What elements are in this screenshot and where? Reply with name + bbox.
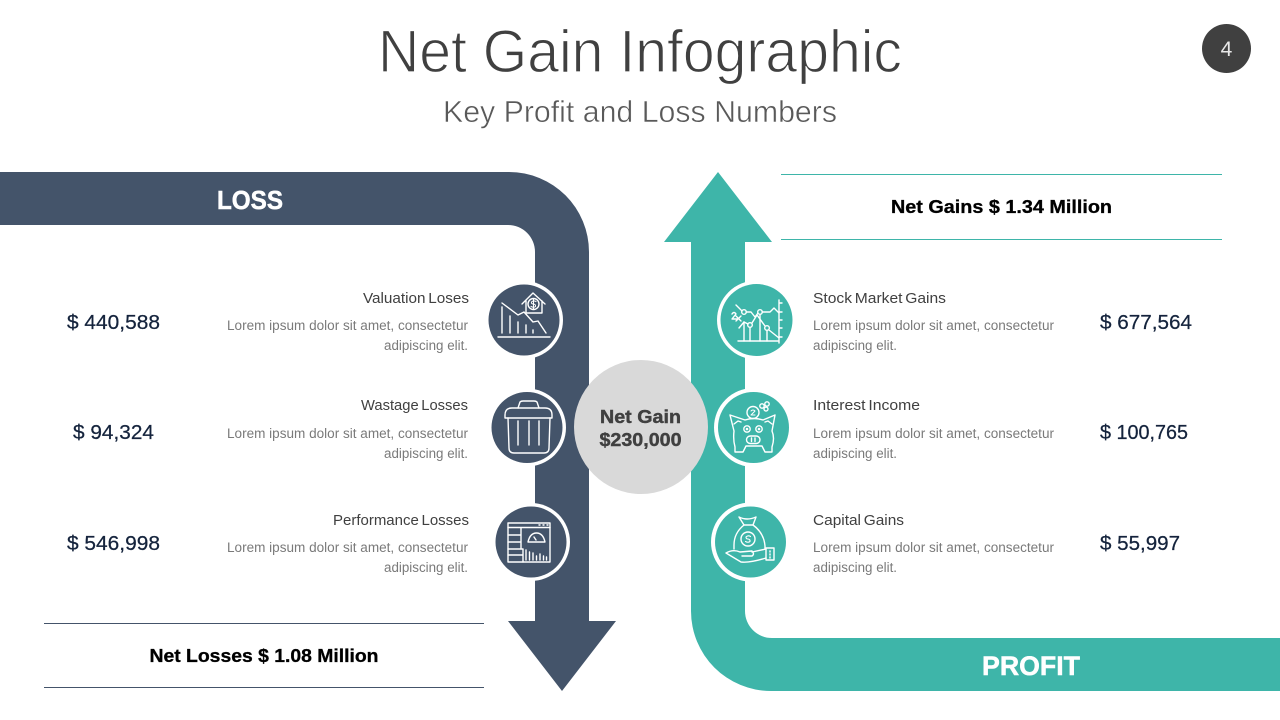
net losses total: Net Losses $ 1.08 Million xyxy=(150,646,378,666)
body: adipiscing elit. xyxy=(813,446,897,461)
profit row 1 xyxy=(717,280,1192,360)
title: Net Gain Infographic xyxy=(378,18,902,85)
icon: falling chart with house xyxy=(485,281,563,359)
body: Lorem ipsum dolor sit amet, consectetur xyxy=(813,318,1054,333)
heading: Valuation Loses xyxy=(363,290,469,307)
page number badge: 4 xyxy=(1221,38,1233,61)
amount: $ 94,324 xyxy=(73,422,154,444)
body: adipiscing elit. xyxy=(813,338,897,353)
heading: Stock Market Gains xyxy=(813,290,946,307)
loss label: LOSS xyxy=(217,185,283,215)
net gain circle xyxy=(574,360,708,494)
net gain circle: Net Gain xyxy=(600,407,681,427)
icon: money bag in hand xyxy=(711,502,790,582)
body: adipiscing elit. xyxy=(384,446,468,461)
loss row 3 xyxy=(67,503,570,581)
loss row 1 xyxy=(67,281,563,359)
body: Lorem ipsum dolor sit amet, consectetur xyxy=(227,540,468,555)
icon: piggy bank xyxy=(714,388,793,467)
amount: $ 55,997 xyxy=(1100,533,1180,555)
profit row 3 xyxy=(711,502,1180,582)
amount: $ 677,564 xyxy=(1100,312,1192,334)
heading: Capital Gains xyxy=(813,512,904,529)
profit label: PROFIT xyxy=(982,651,1080,681)
icon: dashboard xyxy=(492,503,570,581)
heading: Performance Losses xyxy=(333,512,469,529)
subtitle: Key Profit and Loss Numbers xyxy=(443,94,837,129)
body: adipiscing elit. xyxy=(813,560,897,575)
body: Lorem ipsum dolor sit amet, consectetur xyxy=(813,426,1054,441)
body: Lorem ipsum dolor sit amet, consectetur xyxy=(227,318,468,333)
body: Lorem ipsum dolor sit amet, consectetur xyxy=(227,426,468,441)
net gain circle: $230,000 xyxy=(600,430,682,450)
profit row 2 xyxy=(714,388,1188,467)
icon: market chart xyxy=(717,280,796,360)
body: adipiscing elit. xyxy=(384,560,468,575)
heading: Interest Income xyxy=(813,397,920,414)
icon: trash bin xyxy=(488,388,566,466)
body: Lorem ipsum dolor sit amet, consectetur xyxy=(813,540,1054,555)
amount: $ 546,998 xyxy=(67,533,160,555)
loss row 2 xyxy=(73,388,566,466)
body: adipiscing elit. xyxy=(384,338,468,353)
net gains total: Net Gains $ 1.34 Million xyxy=(891,197,1112,217)
amount: $ 100,765 xyxy=(1100,422,1188,444)
heading: Wastage Losses xyxy=(361,397,468,414)
page number badge xyxy=(1202,24,1251,73)
amount: $ 440,588 xyxy=(67,312,160,334)
